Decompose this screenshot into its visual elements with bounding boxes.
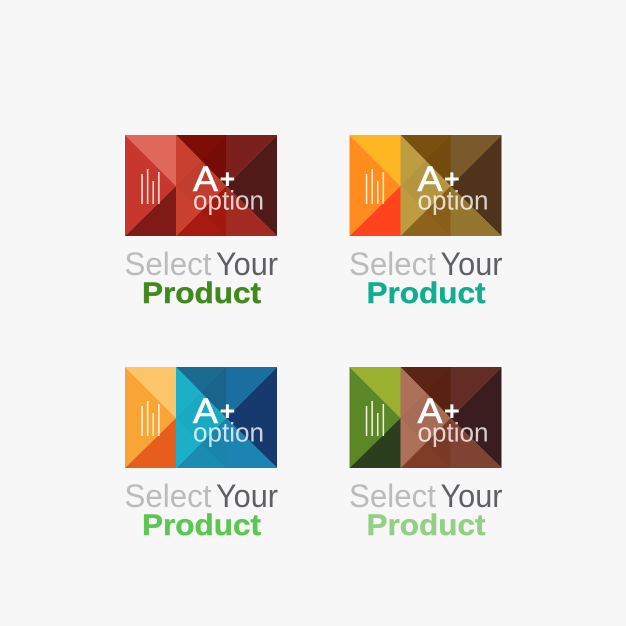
label: A+: A	[193, 160, 219, 199]
icon: blue folded square tile	[125, 367, 277, 468]
panel: green and brown product card	[349, 367, 503, 542]
icon: red folded square tile	[125, 135, 277, 236]
heading: Select: Select	[124, 246, 212, 282]
label: A+: A	[193, 392, 219, 431]
icon: green and brown folded square tile	[350, 367, 502, 468]
label: option: option	[193, 186, 264, 216]
icon: bar lines	[141, 169, 160, 204]
icon: bar lines	[366, 169, 384, 204]
heading: Product: Product	[142, 509, 261, 542]
label: option: option	[418, 186, 488, 216]
heading: Select: Select	[124, 478, 212, 514]
icon: bar lines	[141, 401, 160, 436]
panel: blue product card: +	[220, 396, 235, 426]
heading: Your: Your	[216, 478, 278, 514]
heading: Select: Select	[349, 246, 436, 282]
icon: bar lines	[366, 401, 384, 436]
heading: Your: Your	[440, 478, 503, 514]
heading: Product: Product	[142, 277, 261, 310]
panel: blue product card	[124, 367, 278, 542]
panel: orange product card	[349, 135, 503, 310]
icon: orange folded square tile	[350, 135, 502, 236]
label: A+: A	[418, 392, 443, 431]
panel: orange product card: +	[444, 164, 460, 194]
label: option: option	[418, 418, 488, 448]
panel: green and brown product card: +	[444, 396, 460, 426]
panel: red product card	[124, 135, 278, 310]
panel: red product card: +	[220, 164, 235, 194]
heading: Product: Product	[366, 509, 486, 542]
heading: Your: Your	[216, 246, 278, 282]
label: A+: A	[418, 160, 443, 199]
label: option: option	[193, 418, 264, 448]
heading: Product: Product	[366, 277, 486, 310]
heading: Your: Your	[440, 246, 503, 282]
heading: Select: Select	[349, 478, 436, 514]
